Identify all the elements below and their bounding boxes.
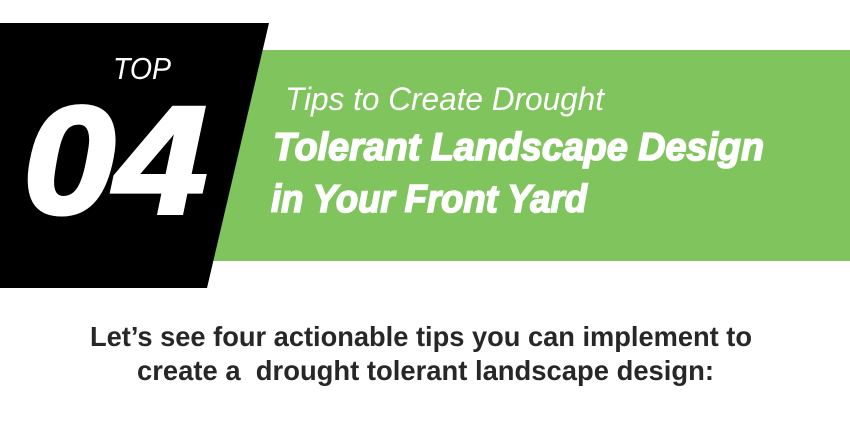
panel: black number badge — [0, 23, 269, 288]
heading: title line 2: Tolerant Landscape Design — [273, 126, 764, 169]
text block: intro sentence: create a drought tolerant landscape design: — [137, 355, 714, 386]
number: 04: 04 — [23, 75, 207, 246]
text block: intro sentence — [90, 321, 752, 386]
text block: intro sentence: Let’s see four actionable tips you can implement to — [90, 321, 752, 352]
heading: title line 1: Tips to Create Drought — [285, 81, 605, 117]
label: TOP: TOP — [113, 51, 171, 86]
heading: title line 3: in Your Front Yard — [271, 178, 588, 221]
panel: green title banner — [213, 50, 850, 261]
